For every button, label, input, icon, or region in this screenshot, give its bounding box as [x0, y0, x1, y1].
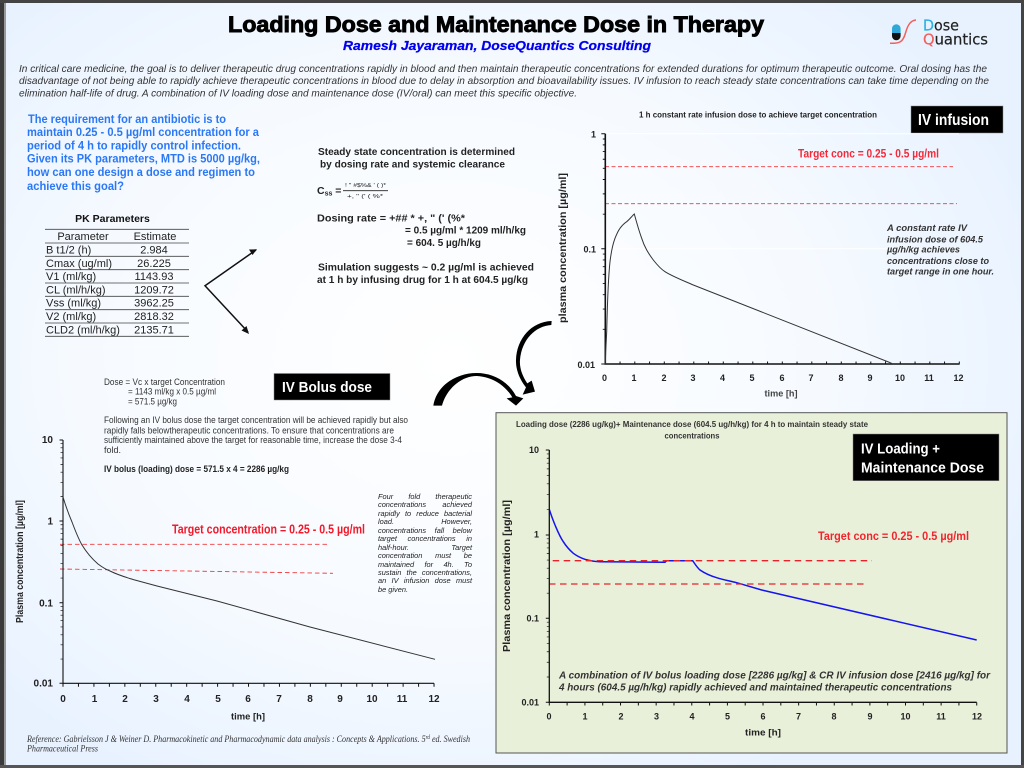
axis labels: 5 [725, 712, 730, 722]
axis labels: 0.1 [39, 598, 53, 610]
text block: bolus chart note: half-hour. Target [378, 543, 472, 552]
panel: IV loading + maintenance [496, 413, 1007, 753]
text block: bolus chart note: concentrations achieved [378, 500, 472, 509]
axis labels: 0.01 [34, 678, 53, 690]
table: PK parameters [45, 213, 189, 336]
text block: bolus chart note: sustain the concentrations, [378, 568, 472, 577]
bolus dose explanation: Following an IV bolus dose the target concentration will be achieved rapidly but also [104, 415, 408, 425]
bolus dose explanation: = 1143 ml/kg x 0.5 µg/ml [128, 386, 216, 396]
table: PK parameters: Vss (ml/kg) [46, 298, 101, 310]
target label: Target conc = 0.25 - 0.5 µg/ml [798, 148, 939, 160]
table: PK parameters: B t1/2 (h) [46, 244, 91, 256]
text block: bolus chart note: Four fold therapeutic [378, 492, 472, 501]
axis labels: 1 [47, 516, 53, 528]
text block: bolus chart note: an IV infusion dose must [378, 576, 472, 585]
axis labels: 7 [796, 712, 801, 722]
chart title: concentrations [664, 430, 720, 440]
chart note: concentrations close to [887, 256, 989, 267]
target lines [60, 544, 333, 573]
steady state explanation: at 1 h by infusing drug for 1 h at 604.5 µg/kg [317, 274, 528, 286]
question text block: achieve this goal? [27, 181, 124, 193]
axis labels: 1 [591, 130, 596, 140]
bolus dose explanation: sufficiently maintained above the target for reasonable time, increase the dose 3-4 [104, 435, 402, 445]
axis labels: 5 [749, 373, 755, 383]
arrow: curved from infusion to combination [516, 321, 552, 395]
badge: IV Loading + Maintenance Dose [853, 434, 999, 481]
chart title: 1 h constant rate infusion dose to achieve target concentration [639, 110, 877, 120]
axis labels: 9 [337, 694, 343, 705]
steady state explanation: by dosing rate and systemic clearance [320, 158, 505, 170]
curve: plasma concentration [63, 497, 435, 659]
question text block: Given its PK parameters, MTD is 5000 µg/kg, [27, 154, 260, 166]
table: PK parameters: V1 (ml/kg) [46, 271, 96, 283]
target label: Target conc = 0.25 - 0.5 µg/ml [818, 531, 969, 543]
table: PK parameters: 26.225 [137, 258, 171, 270]
axis labels: 12 [953, 373, 964, 383]
bolus dose explanation: = 571.5 µg/kg [128, 396, 177, 406]
table: PK parameters: 1209.72 [134, 284, 174, 296]
axis labels: 4 [720, 373, 725, 383]
text block: bolus chart note: maintained for 4h. To [378, 560, 472, 568]
axis labels: 6 [760, 712, 766, 722]
table: PK parameters: 2.984 [140, 244, 168, 256]
reference citation [26, 734, 470, 754]
reference citation: ed. Swedish [430, 735, 470, 745]
intro paragraph [19, 63, 989, 100]
chart note: A constant rate IV [886, 223, 968, 234]
logo wordmark [923, 16, 988, 48]
axis labels: 8 [831, 712, 837, 722]
bolus dose explanation: fold. [104, 445, 121, 455]
curve: plasma concentration [549, 509, 977, 640]
chart note: µg/h/kg achieves [886, 244, 960, 256]
axis labels: 5 [215, 694, 221, 705]
axis labels [521, 445, 982, 722]
steady state explanation [317, 146, 534, 286]
steady state explanation: Steady state concentration is determined [318, 146, 515, 158]
axis labels: 7 [808, 373, 814, 383]
axis labels: 3 [690, 373, 696, 383]
question text block: The requirement for an antibiotic is to [28, 114, 226, 126]
chart note [558, 670, 991, 694]
subtitle: author: Ramesh Jayaraman, DoseQuantics Consulting [343, 38, 651, 53]
axis labels: 8 [838, 373, 844, 383]
table: PK parameters: 2818.32 [134, 311, 174, 323]
question text block: maintain 0.25 - 0.5 µg/ml concentration for a [27, 127, 260, 139]
axis labels: 0.1 [583, 244, 596, 254]
axis labels: 10 [895, 373, 905, 383]
icon: red curve [890, 20, 916, 43]
bolus dose explanation: IV bolus (loading) dose = 571.5 x 4 = 2286 µg/kg [104, 464, 289, 474]
axis labels: 3 [153, 694, 159, 705]
text block: bolus chart note: rapidly to reduce bacterial [378, 509, 472, 518]
axis labels: 0.01 [577, 360, 595, 370]
axis labels: 1 [534, 530, 539, 540]
table: PK parameters: CL (ml/h/kg) [46, 284, 106, 296]
bolus dose explanation: Dose = Vc x target Concentration [104, 377, 225, 387]
table: PK parameters: 3962.25 [134, 298, 174, 310]
steady state explanation: Dosing rate = +## * +, " (' (%* [317, 212, 466, 224]
text block: bolus chart note: be given. [378, 585, 408, 594]
chart: IV infusion: time [h] [764, 388, 798, 398]
panel: IV loading + maintenance: time [h] [745, 728, 781, 738]
axis labels: 6 [779, 373, 785, 383]
table: PK parameters: V2 (ml/kg) [46, 311, 96, 323]
badge: IV Loading + Maintenance Dose: IV Loading + [861, 440, 940, 458]
text block: bolus chart note [378, 492, 472, 594]
axis labels: 0 [546, 712, 552, 722]
text block: bolus chart note: target concentrations in [378, 534, 472, 543]
axis labels: 4 [184, 694, 190, 705]
axis labels: 11 [936, 712, 946, 722]
axis labels: 1 [631, 373, 637, 383]
table heading: PK Parameters [75, 213, 150, 225]
target lines [605, 167, 957, 204]
axis labels: 12 [972, 712, 982, 722]
equation: Css: +, " (' ( %* [347, 194, 384, 200]
steady state explanation: = 0.5 µg/ml * 1209 ml/h/kg [405, 224, 526, 236]
table: PK parameters: Parameter [57, 231, 109, 243]
badge: IV Loading + Maintenance Dose: Maintenance Dose [861, 460, 984, 476]
equation: Css: = [332, 185, 341, 197]
text block: bolus chart note: concentrations fall below [378, 526, 472, 535]
axis labels [34, 435, 440, 705]
intro paragraph: disadvantage of not being able to rapidly achieve therapeutic concentrations in blood due to delay in absorption and bioavailability issues. IV infusion to reach steady state concentrations can take time depending on the [19, 75, 989, 87]
badge: IV infusion [911, 106, 1003, 133]
text block: bolus chart note: load. However, [378, 517, 472, 526]
axis labels: 10 [900, 712, 911, 722]
question text block: how can one design a dose and regimen to [27, 167, 255, 179]
axis labels: 2 [122, 694, 128, 705]
axis labels: 0 [602, 373, 607, 383]
axis labels: 0.1 [526, 614, 539, 624]
logo wordmark: Dose [923, 16, 959, 34]
axis labels: 10 [366, 694, 378, 705]
badge: IV Bolus dose [274, 374, 390, 400]
axis labels: 8 [307, 694, 313, 705]
table: PK parameters: 2135.71 [134, 324, 174, 336]
intro paragraph: In critical care medicine, the goal is to deliver therapeutic drug concentrations rapidly in blood and then maintain therapeutic concentrations for extended durations for optimum therapeutic outcome. Oral dosing has the [19, 63, 987, 75]
badge: IV Bolus dose: IV Bolus dose [282, 379, 372, 396]
reference citation: Pharmaceutical Press [26, 744, 98, 754]
chart note: 4 hours (604.5 µg/h/kg) rapidly achieved and maintained therapeutic concentrations [558, 682, 952, 694]
axis labels: 1 [92, 694, 98, 705]
chart note: A combination of IV bolus loading dose [2286 µg/kg] & CR IV infusion dose [2416 µg/kg] for [558, 670, 991, 682]
axis labels: 7 [276, 694, 282, 705]
table: PK parameters: Cmax (ug/ml) [46, 258, 112, 270]
bolus dose explanation: rapidly falls belowtherapeutic concentrations. To ensure that concentrations are [104, 426, 394, 436]
intro paragraph: elimination half-life of drug. A combination of IV loading dose and maintenance dose (IV/oral) can meet this specific objective. [19, 88, 577, 100]
axis labels: 1 [582, 712, 588, 722]
equation: Css: ss [325, 190, 332, 198]
axes [601, 134, 960, 364]
reference citation: Reference: Gabrielsson J & Weiner D. Pharmacokinetic and Pharmacodynamic data analysis : Concepts & Applications. 5 [27, 735, 497, 745]
title: Loading Dose and Maintenance Dose in Therapy [228, 12, 765, 37]
axis labels: 10 [529, 445, 539, 455]
panel: IV loading + maintenance: Plasma concentration [µg/ml] [501, 500, 513, 652]
chart: IV infusion: plasma concentration [µg/ml] [557, 173, 569, 323]
steady state explanation: = 604. 5 µg/h/kg [407, 237, 481, 249]
axis labels [577, 130, 964, 383]
steady state explanation: Simulation suggests ~ 0.2 µg/ml is achieved [318, 262, 534, 274]
table: PK parameters: 1143.93 [135, 271, 173, 283]
axis labels: 2 [618, 712, 624, 722]
chart: IV bolus: Plasma concentration [µg/ml] [15, 500, 26, 623]
chart: IV infusion [557, 106, 1003, 398]
axes [546, 450, 978, 704]
chart note: infusion dose of 604.5 [887, 234, 984, 246]
target lines [549, 561, 872, 584]
chart: IV bolus: time [h] [231, 712, 265, 722]
question text block: period of 4 h to rapidly control infection. [27, 140, 241, 152]
arrow: curved from bolus to combination [433, 373, 523, 406]
arrows: from table to next steps [205, 249, 257, 334]
badge: IV infusion: IV infusion [918, 112, 989, 129]
table: PK parameters: CLD2 (ml/h/kg) [46, 324, 120, 336]
axis labels: 2 [661, 373, 667, 383]
target label: Target concentration = 0.25 - 0.5 µg/ml [172, 522, 365, 536]
axis labels: 3 [654, 712, 659, 722]
axes [60, 440, 435, 685]
chart: IV bolus [15, 435, 440, 722]
reference citation: rd [426, 735, 431, 741]
bolus dose explanation [104, 377, 408, 474]
axis labels: 9 [867, 712, 873, 722]
axis labels: 0.01 [521, 698, 539, 708]
question text block [27, 114, 260, 193]
chart title [516, 419, 868, 440]
equation: Css: ! " #$%& ' ( )* [345, 183, 387, 189]
chart note: target range in one hour. [887, 266, 994, 278]
axis labels: 0 [60, 694, 66, 705]
axis labels: 11 [924, 373, 934, 383]
equation: Css [317, 183, 388, 200]
logo wordmark: Quantics [923, 30, 988, 48]
equation: Css: C [317, 185, 325, 197]
axis labels: 12 [428, 694, 440, 705]
logo: DoseQuantics [890, 16, 988, 48]
icon: capsule [892, 24, 901, 40]
chart title: Loading dose (2286 ug/kg)+ Maintenance dose (604.5 ug/h/kg) for 4 h to maintain steady state [516, 419, 868, 429]
chart note [886, 223, 994, 278]
axis labels: 11 [397, 694, 408, 705]
curve: plasma concentration [605, 214, 892, 364]
text block: bolus chart note: concentration must be [378, 551, 472, 560]
axis labels: 10 [42, 435, 53, 446]
table: PK parameters: Estimate [134, 231, 176, 243]
axis labels: 6 [245, 694, 251, 705]
axis labels: 4 [689, 712, 695, 722]
axis labels: 9 [867, 373, 873, 383]
